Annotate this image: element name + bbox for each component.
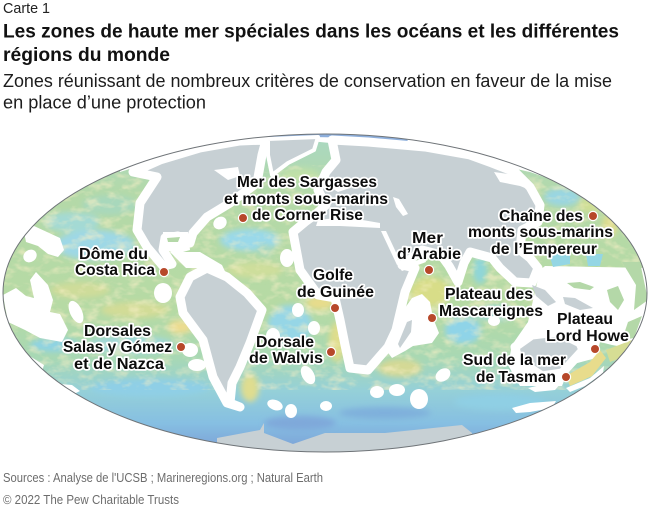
white block around Madagascar and Mascarenes [386,294,439,358]
label: Sargasso Sea: de Corner Rise [252,207,363,224]
Greenland [268,137,318,175]
map labels [63,174,629,386]
North America [133,140,266,266]
label: Lord Howe Rise: Lord Howe [546,328,629,345]
label: Gulf of Guinea [297,267,374,301]
green and blue patches in western Pacific [549,254,648,386]
Antarctica [217,423,472,452]
Indonesian islands [532,285,556,306]
label: Emperor Seamount Chain: de l’Empereur [491,241,597,258]
label: Emperor Seamount Chain: monts sous-marins [468,224,613,241]
label: Arabian Sea: Mer [412,230,443,247]
label: Arabian Sea: d’Arabie [397,246,461,263]
Australia [510,337,578,372]
label: Salas y Gomez and Nazca Ridges: et de Nazca [74,356,164,373]
label: Emperor Seamount Chain: Chaîne des [499,208,583,225]
Caspian, Mediterranean, Red Sea and inland waters [162,167,524,271]
label: Sargasso Sea: Mer des Sargasses [237,174,377,191]
subtitle: en place d’une protection [3,92,206,112]
label: Salas y Gomez and Nazca Ridges: Salas y Gómez [63,339,172,356]
label: Walvis Ridge: de Walvis [249,350,323,367]
title [3,20,619,66]
arctic blue sliver [270,134,408,141]
label: Mascarene Plateau [439,286,543,320]
label: Sargasso Sea [224,174,388,224]
label: Costa Rica Dome [75,246,155,279]
sources: Sources : Analyse de l'UCSB ; Marineregions.org ; Natural Earth [3,471,323,485]
ocean mottling [0,165,650,390]
white arctic band [120,137,543,176]
label: South Tasman Sea: Sud de la mer [463,352,566,369]
New Guinea [563,297,593,310]
ocean colour base [0,130,650,456]
label: Walvis Ridge: Dorsale [256,334,314,351]
label: Costa Rica Dome: Costa Rica [75,262,155,279]
label: Gulf of Guinea: Golfe [313,267,353,284]
subtitle: Zones réunissant de nombreux critères de conservation en faveur de la mise [3,70,612,91]
label: Sargasso Sea: et monts sous-marins [224,191,388,208]
label: Arabian Sea [397,230,461,263]
label: Salas y Gomez and Nazca Ridges [63,323,172,373]
label: Gulf of Guinea: de Guinée [297,284,374,301]
label: Costa Rica Dome: Dôme du [79,246,148,263]
label: Lord Howe Rise: Plateau [557,311,613,328]
small green patch in Gulf of Mexico [167,237,180,242]
label: Walvis Ridge [249,334,323,367]
white high-seas exclusion blobs [3,214,650,418]
label: Carte 1: Carte 1 [3,1,50,17]
world map [0,125,650,460]
label: Mascarene Plateau: Plateau des [445,286,533,303]
copyright: © 2022 The Pew Charitable Trusts [3,493,179,507]
label: South Tasman Sea [463,352,566,386]
subtitle [3,70,612,112]
title: Les zones de haute mer spéciales dans les océans et les différentes [3,20,619,42]
land: white coastal zones with grey landmass [133,137,593,460]
label: Emperor Seamount Chain [468,208,613,258]
South America [180,268,262,407]
Madagascar [398,320,412,348]
label: Mascarene Plateau: Mascareignes [439,303,543,320]
map outline [3,134,647,452]
label: Lord Howe Rise [546,311,629,345]
location markers [159,211,600,382]
white block western Pacific, Indonesia, Melanesia [508,266,650,386]
label: South Tasman Sea: de Tasman [476,369,556,386]
Eurasia and Africa [293,140,540,370]
label: Salas y Gomez and Nazca Ridges: Dorsales [84,323,151,340]
title: régions du monde [3,44,170,66]
